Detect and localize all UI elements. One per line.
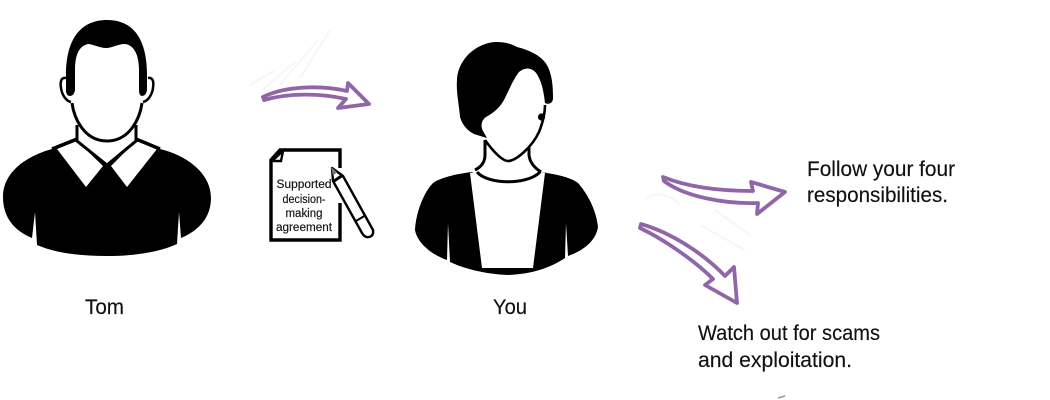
icon: Tom, man avatar — [3, 20, 211, 256]
label: Tom: Tom — [85, 296, 124, 319]
text: watch out for scams and exploitation — [698, 322, 880, 372]
text: follow your four responsibilities: responsibilities. — [807, 184, 948, 207]
text: watch out for scams and exploitation: and exploitation. — [698, 349, 852, 372]
label: You: You — [493, 296, 527, 319]
icon: pen — [331, 167, 373, 237]
document text: Supported — [276, 179, 332, 191]
icon: supported decision-making agreement document — [271, 150, 373, 240]
arrow: Tom to You — [263, 83, 369, 108]
arrow: to responsibilities — [663, 177, 785, 214]
document text: making — [286, 208, 322, 220]
text: follow your four responsibilities: Follow your four — [807, 158, 955, 181]
arrow: to scams — [640, 224, 737, 303]
document text: decision- — [282, 194, 326, 206]
document text: agreement — [276, 222, 333, 234]
text: watch out for scams and exploitation: Watch out for scams — [698, 322, 880, 345]
icon: You, woman avatar — [415, 42, 598, 275]
document text — [276, 179, 333, 234]
text: follow your four responsibilities — [807, 158, 955, 207]
